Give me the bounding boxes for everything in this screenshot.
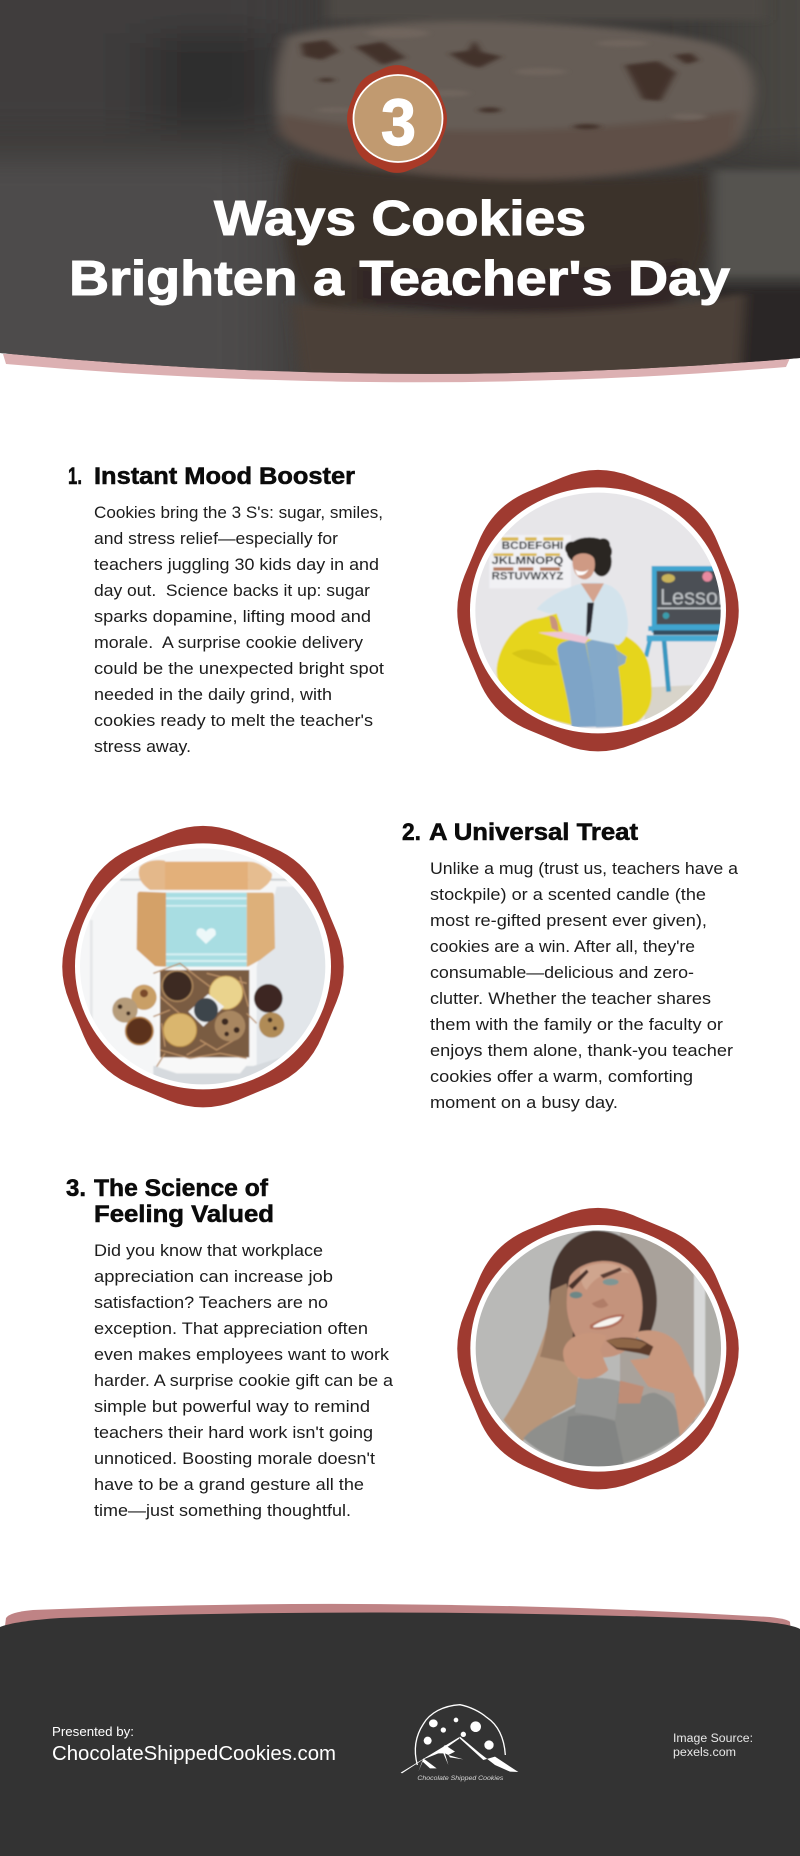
pink curved band under header — [3, 354, 790, 382]
body text section 3: Did you know that workplace — [94, 1241, 323, 1260]
body text section 3: unnoticed. Boosting morale doesn't — [94, 1449, 375, 1468]
body text section 2: cookies are a win. After all, they're — [430, 937, 695, 956]
photo: open cookie gift box — [62, 826, 344, 1107]
body text section 1: teachers juggling 30 kids day in and — [94, 555, 379, 574]
body text section 2: most re-gifted present ever given), — [430, 911, 707, 930]
logo: Chocolate Shipped Cookies: Chocolate Shipped Cookies — [417, 1775, 504, 1782]
body text section 1: cookies ready to melt the teacher's — [94, 711, 373, 730]
body text section 1: Cookies bring the 3 S's: sugar, smiles, — [94, 503, 383, 522]
panel: footer — [0, 1604, 800, 1856]
heading: A Universal Treat: A Universal Treat — [429, 819, 638, 846]
body text section 3: simple but powerful way to remind — [94, 1397, 370, 1416]
photo: woman eating a cookie — [457, 1208, 739, 1489]
heading: Instant Mood Booster: Instant Mood Booster — [94, 463, 355, 490]
body text section 1 — [94, 503, 384, 756]
photo: teacher on yellow beanbag: Lesson — [660, 584, 730, 609]
panel: section 1 text — [68, 463, 384, 756]
presented by credit — [52, 1724, 336, 1765]
body text section 2: consumable—delicious and zero- — [430, 963, 694, 982]
body text section 1: could be the unexpected bright spot — [94, 659, 384, 678]
title: Brighten a Teacher's Day — [69, 252, 730, 306]
footer background — [0, 1612, 800, 1856]
body text section 1: day out. Science backs it up: sugar — [94, 581, 370, 600]
body text section 2: stockpile) or a scented candle (the — [430, 885, 706, 904]
body text section 3: satisfaction? Teachers are no — [94, 1293, 328, 1312]
photo: teacher on yellow beanbag — [457, 470, 739, 751]
title: Ways Cookies — [214, 192, 586, 246]
body text section 2: moment on a busy day. — [430, 1093, 618, 1112]
presented by credit: Presented by: — [52, 1724, 134, 1739]
header background photo: stacked cookies — [0, 0, 800, 410]
presented by credit: ChocolateShippedCookies.com — [52, 1743, 336, 1765]
body text section 3: appreciation can increase job — [94, 1267, 333, 1286]
body text section 2: enjoys them alone, thank-you teacher — [430, 1041, 733, 1060]
body text section 3: teachers their hard work isn't going — [94, 1423, 373, 1442]
image source credit: Image Source: — [673, 1733, 753, 1745]
panel: header — [0, 0, 800, 410]
body text section 3 — [94, 1241, 394, 1520]
body text section 3: time—just something thoughtful. — [94, 1501, 351, 1520]
image source credit — [673, 1733, 753, 1759]
heading: The Science of Feeling Valued — [66, 1175, 274, 1228]
body text section 2: clutter. Whether the teacher shares — [430, 989, 711, 1008]
body text section 3: exception. That appreciation often — [94, 1319, 368, 1338]
heading: Instant Mood Booster: 1. — [68, 463, 82, 490]
panel: section 3 text — [66, 1175, 394, 1520]
body text section 2: them with the family or the faculty or — [430, 1015, 723, 1034]
body text section 3: have to be a grand gesture all the — [94, 1475, 364, 1494]
body text section 1: stress away. — [94, 737, 191, 756]
body text section 1: needed in the daily grind, with — [94, 685, 332, 704]
heading: A Universal Treat: 2. — [402, 819, 421, 846]
body text section 2 — [430, 859, 739, 1112]
body text section 1: and stress relief—especially for — [94, 529, 338, 548]
body text section 1: morale. A surprise cookie delivery — [94, 633, 364, 652]
body text section 2: Unlike a mug (trust us, teachers have a — [430, 859, 739, 878]
heading: The Science of Feeling Valued: The Science of — [94, 1175, 269, 1202]
pink curved band above footer — [5, 1604, 791, 1632]
image source credit: pexels.com — [673, 1747, 736, 1759]
title — [69, 192, 730, 306]
photo: teacher on yellow beanbag: JKLMNOPQ — [492, 555, 564, 567]
logo: Chocolate Shipped Cookies — [401, 1705, 518, 1782]
body text section 2: cookies offer a warm, comforting — [430, 1067, 693, 1086]
photo: teacher on yellow beanbag: BCDEFGHI — [502, 540, 563, 552]
body text section 3: harder. A surprise cookie gift can be a — [94, 1371, 394, 1390]
body text section 3: even makes employees want to work — [94, 1345, 390, 1364]
heading: The Science of Feeling Valued: 3. — [66, 1175, 86, 1202]
body text section 1: sparks dopamine, lifting mood and — [94, 607, 371, 626]
badge: number 3 — [347, 65, 447, 173]
badge: number 3: 3 — [381, 85, 416, 159]
photo: teacher on yellow beanbag: RSTUVWXYZ — [492, 570, 563, 582]
heading: The Science of Feeling Valued: Feeling Valued — [94, 1201, 274, 1228]
panel: section 2 text — [402, 819, 739, 1112]
